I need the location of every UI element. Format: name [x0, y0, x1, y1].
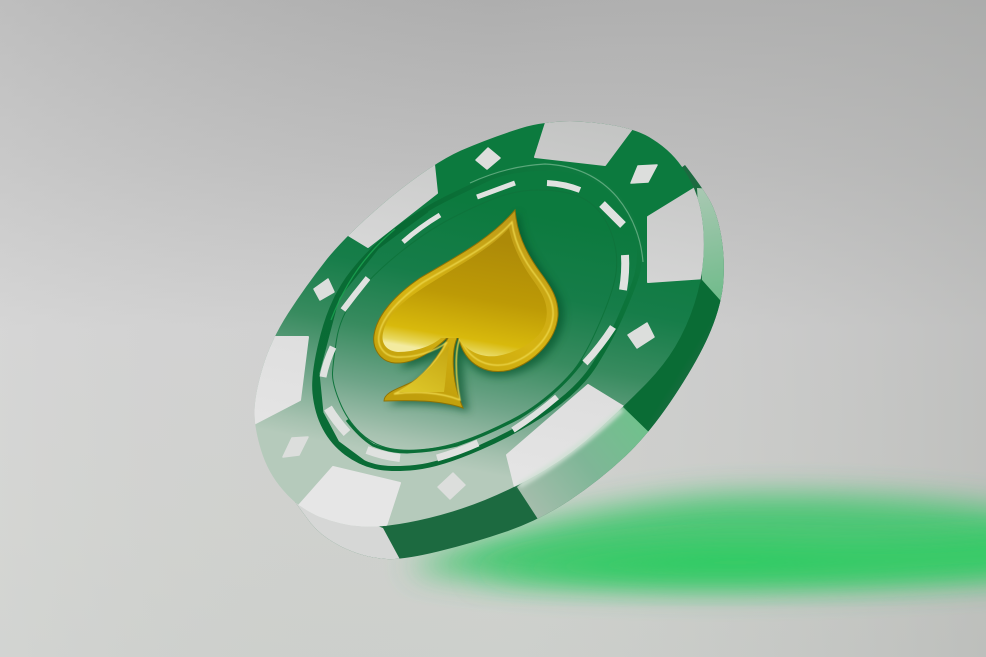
side band: dark right segment — [623, 280, 720, 432]
chip — [254, 122, 724, 560]
white edge bands — [245, 110, 720, 535]
dashes — [323, 183, 625, 458]
spade shadow — [388, 212, 564, 412]
side band: upper right — [697, 188, 724, 301]
green cast shadow — [405, 494, 986, 589]
diamonds — [283, 148, 657, 499]
inner ring groove — [315, 164, 643, 469]
soft edge of lower right band — [519, 409, 622, 486]
spade stem fill — [399, 346, 449, 392]
centre disk — [332, 190, 617, 452]
chip side edge — [294, 165, 724, 560]
spade body fill — [383, 228, 547, 356]
spade rim — [374, 210, 558, 408]
side band: white lower left — [295, 502, 400, 560]
spade rim highlight — [379, 222, 553, 400]
side band: lower right — [517, 407, 648, 518]
ring highlights — [470, 164, 643, 262]
gold spade — [374, 210, 564, 412]
chip face — [245, 110, 720, 535]
disk lower edge — [347, 360, 583, 452]
